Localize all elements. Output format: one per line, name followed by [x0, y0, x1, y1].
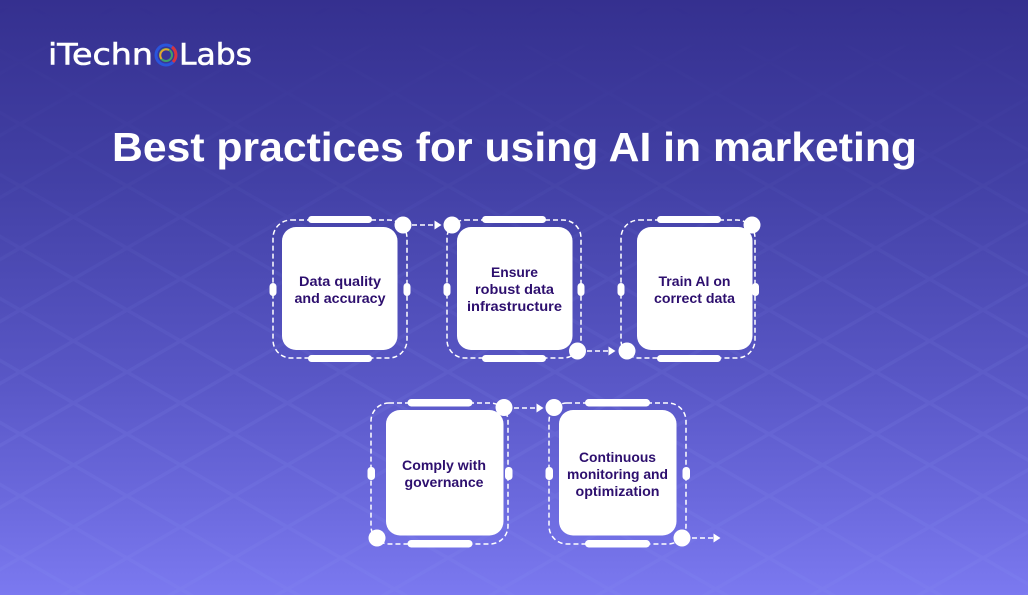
panel: train AI on correct data: [618, 216, 760, 362]
title: Best practices for using AI in marketing: [112, 124, 917, 170]
panel: comply with governance: governance: [404, 474, 484, 490]
panel: ensure robust data infrastructure: Ensure: [491, 264, 538, 280]
arrow: step 1 to 2: [412, 220, 442, 230]
panel: ensure robust data infrastructure: [444, 216, 586, 362]
panel: continuous monitoring and optimization: [546, 399, 690, 548]
panel: ensure robust data infrastructure: infrastructure: [467, 298, 562, 314]
panel: data quality and accuracy: Data quality: [299, 273, 381, 289]
panel: comply with governance: [368, 399, 512, 548]
panel: data quality and accuracy: and accuracy: [294, 290, 386, 306]
arrow: step 2 to 3: [587, 346, 616, 356]
panel: continuous monitoring and optimization: monitoring and: [567, 466, 668, 482]
panel: continuous monitoring and optimization: optimization: [576, 483, 660, 499]
panel: continuous monitoring and optimization: Continuous: [579, 449, 656, 465]
logo: iTechnoLabs: iTechn: [48, 38, 153, 72]
panel: comply with governance: Comply with: [402, 457, 486, 473]
panel: ensure robust data infrastructure: robust data: [475, 281, 554, 297]
panel: train AI on correct data: Train AI on: [658, 273, 730, 289]
logo: iTechnoLabs: Labs: [179, 38, 252, 72]
arrow: step 5 exit: [692, 534, 720, 542]
icon: logo ring: [156, 45, 176, 65]
arrow: step 4 to 5: [514, 404, 544, 412]
panel: train AI on correct data: correct data: [654, 290, 735, 306]
logo: iTechnoLabs: [48, 38, 252, 72]
panel: data quality and accuracy: [270, 216, 412, 362]
